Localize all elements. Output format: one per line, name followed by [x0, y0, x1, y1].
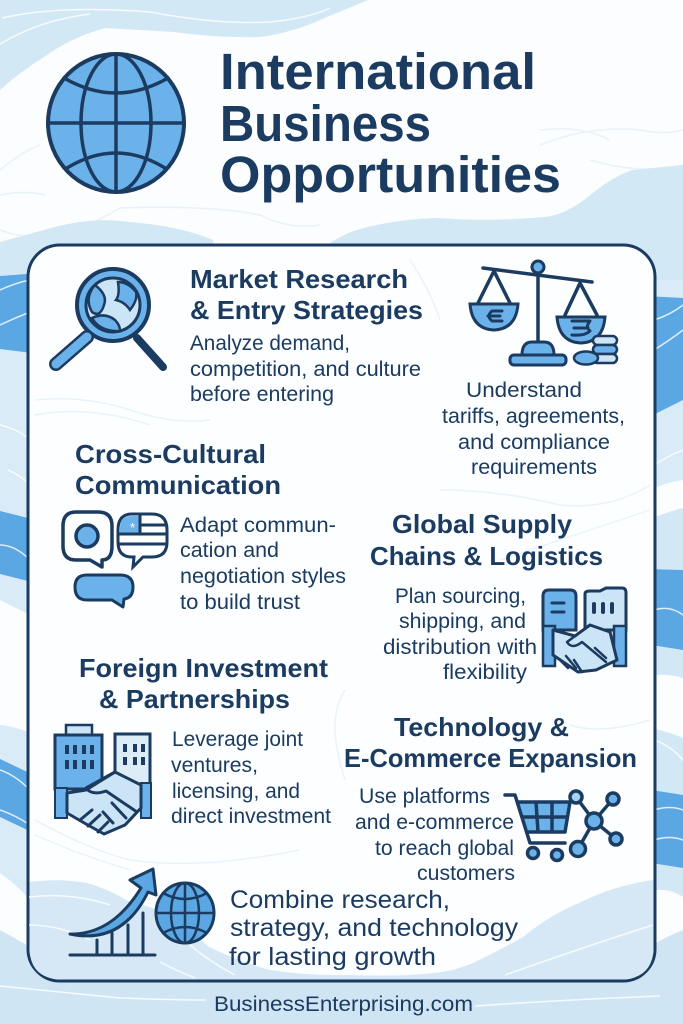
heading: foreign investment [79, 653, 328, 714]
icon: speech bubbles with flag: * [130, 520, 135, 535]
text: global supply chains: distribution with [383, 636, 537, 659]
text: tariffs and compliance: and compliance [458, 431, 610, 454]
icon: buildings and handshake, small [543, 588, 626, 672]
text: technology and e-commerce: to reach global [375, 837, 514, 860]
text: conclusion [229, 886, 519, 971]
text: foreign investment: direct investment [171, 805, 331, 828]
text: cross-cultural communication: Adapt commun- [180, 514, 336, 537]
text: global supply chains: flexibility [443, 661, 528, 684]
heading: global supply chains [370, 509, 603, 571]
text: tariffs and compliance: requirements [471, 456, 597, 479]
title: Opportunities [220, 146, 561, 203]
icon: growth arrow and bars [70, 869, 156, 955]
icon: buildings and handshake [55, 725, 151, 834]
icon: speech bubbles with flag [63, 512, 167, 607]
title: Business [220, 95, 431, 152]
heading: cross-cultural communication: Communication [75, 470, 281, 500]
icon: magnifying glass with globe [56, 269, 163, 367]
text: technology and e-commerce: Use platforms [359, 785, 490, 808]
heading: foreign investment: & Partnerships [99, 684, 290, 714]
text: market research: Analyze demand, [190, 332, 350, 355]
text: tariffs and compliance: Understand [466, 379, 582, 402]
text: conclusion: strategy, and technology [230, 914, 519, 942]
title: International [220, 43, 536, 100]
icon: globe [48, 54, 184, 192]
heading: technology and e-commerce: Technology & [394, 712, 569, 742]
text: cross-cultural communication: cation and [180, 539, 279, 562]
text: technology and e-commerce [355, 785, 515, 885]
text: foreign investment [171, 728, 331, 828]
text: cross-cultural communication: to build trust [180, 591, 300, 614]
text: global supply chains: shipping, and [399, 610, 526, 633]
icon: balance scales with coins [470, 261, 617, 365]
heading: market research: Market Research [190, 264, 408, 294]
text: cross-cultural communication [180, 514, 346, 614]
heading: global supply chains: Global Supply [392, 509, 573, 539]
text: market research: competition, and culture [190, 358, 421, 381]
icon: shopping cart with network [505, 791, 622, 860]
heading: technology and e-commerce [344, 712, 637, 773]
heading: cross-cultural communication: Cross-Cultural [75, 439, 266, 469]
text: technology and e-commerce: and e-commerce [355, 811, 514, 834]
footer website: BusinessEnterprising.com [214, 993, 473, 1016]
heading: cross-cultural communication [75, 439, 281, 500]
text: conclusion: Combine research, [230, 886, 450, 914]
heading: market research [190, 264, 423, 325]
heading: foreign investment: Foreign Investment [79, 653, 328, 683]
text: market research: before entering [190, 383, 334, 406]
text: market research [190, 332, 421, 406]
text: cross-cultural communication: negotiation styles [180, 565, 346, 588]
text: foreign investment: Leverage joint [172, 728, 303, 751]
title [220, 43, 561, 203]
heading: market research: & Entry Strategies [190, 295, 423, 325]
text: global supply chains [383, 585, 537, 684]
heading: technology and e-commerce: E-Commerce Expansion [344, 743, 637, 773]
icon: small globe [156, 883, 214, 943]
text: foreign investment: licensing, and [172, 780, 300, 803]
text: tariffs and compliance [442, 379, 625, 479]
text: global supply chains: Plan sourcing, [395, 585, 526, 608]
heading: global supply chains: Chains & Logistics [370, 541, 603, 571]
text: conclusion: for lasting growth [229, 943, 436, 971]
text: technology and e-commerce: customers [417, 862, 515, 885]
text: tariffs and compliance: tariffs, agreements, [442, 405, 625, 428]
text: foreign investment: ventures, [171, 754, 258, 777]
main panel [28, 245, 655, 981]
